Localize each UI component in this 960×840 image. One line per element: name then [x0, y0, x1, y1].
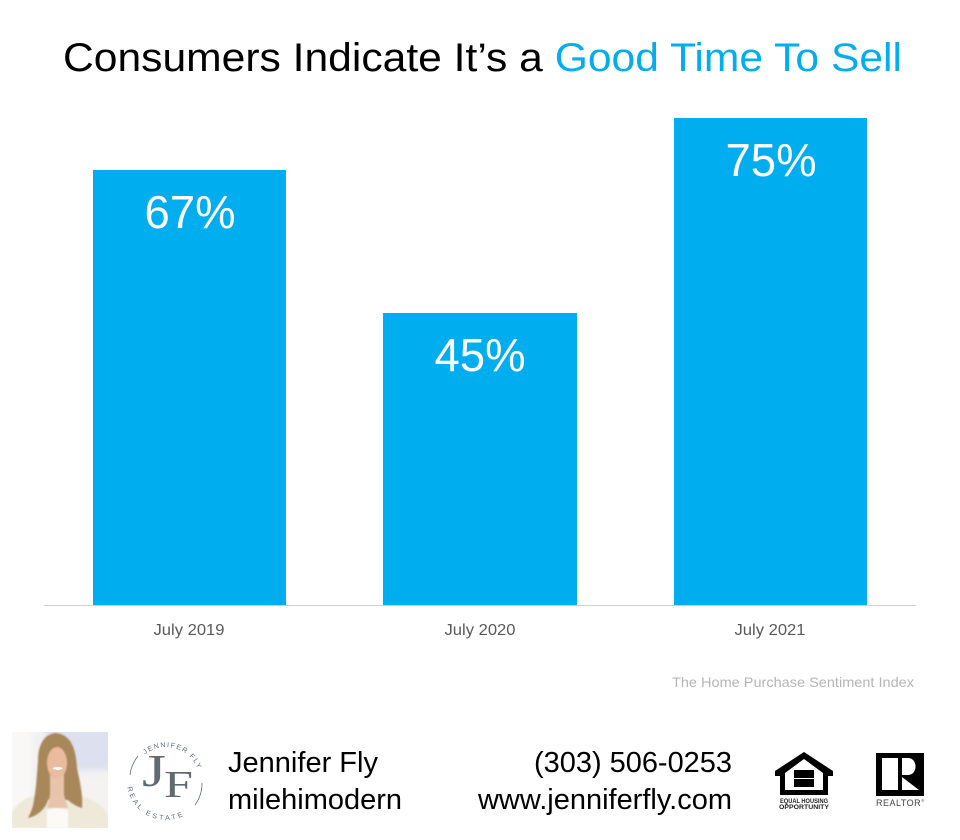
icon: equal housing opportunity: OPPORTUNITY [779, 804, 830, 811]
logo ring [130, 756, 202, 805]
axis line [44, 605, 916, 606]
phone: (303) 506-0253 [534, 747, 732, 779]
title: Consumers Indicate It’s a Good Time To Sell [63, 36, 902, 80]
website: www.jenniferfly.com [477, 784, 732, 816]
source note: The Home Purchase Sentiment Index [672, 674, 914, 690]
icon: realtor: REALTOR [876, 798, 921, 808]
icon: equal housing opportunity [775, 752, 833, 811]
bar: July 2020 [383, 313, 577, 605]
label: July 2021: July 2021 [734, 622, 806, 639]
logo monogram J: J [142, 745, 166, 796]
bar: July 2021 [674, 118, 867, 605]
value: 67%: 67% [144, 186, 236, 238]
value: 75%: 75% [726, 134, 816, 186]
icon: realtor [876, 753, 925, 808]
logo: Jennifer Fly Real Estate [128, 742, 202, 820]
agent photo [12, 732, 108, 828]
agent name: Jennifer Fly [228, 747, 378, 779]
icon: equal housing opportunity: EQUAL HOUSING [780, 798, 828, 805]
icon: realtor: ® [921, 798, 925, 803]
label: July 2020: July 2020 [444, 622, 516, 639]
bar: July 2019 [93, 170, 286, 605]
logo ring text top: JENNIFER FLY [143, 742, 202, 767]
agent brand: milehimodern [228, 784, 402, 816]
value: 45%: 45% [434, 329, 526, 381]
label: July 2019: July 2019 [154, 622, 225, 639]
logo ring text bottom: REAL ESTATE [128, 786, 183, 820]
logo monogram F: F [164, 764, 193, 806]
bar chart [44, 118, 916, 639]
